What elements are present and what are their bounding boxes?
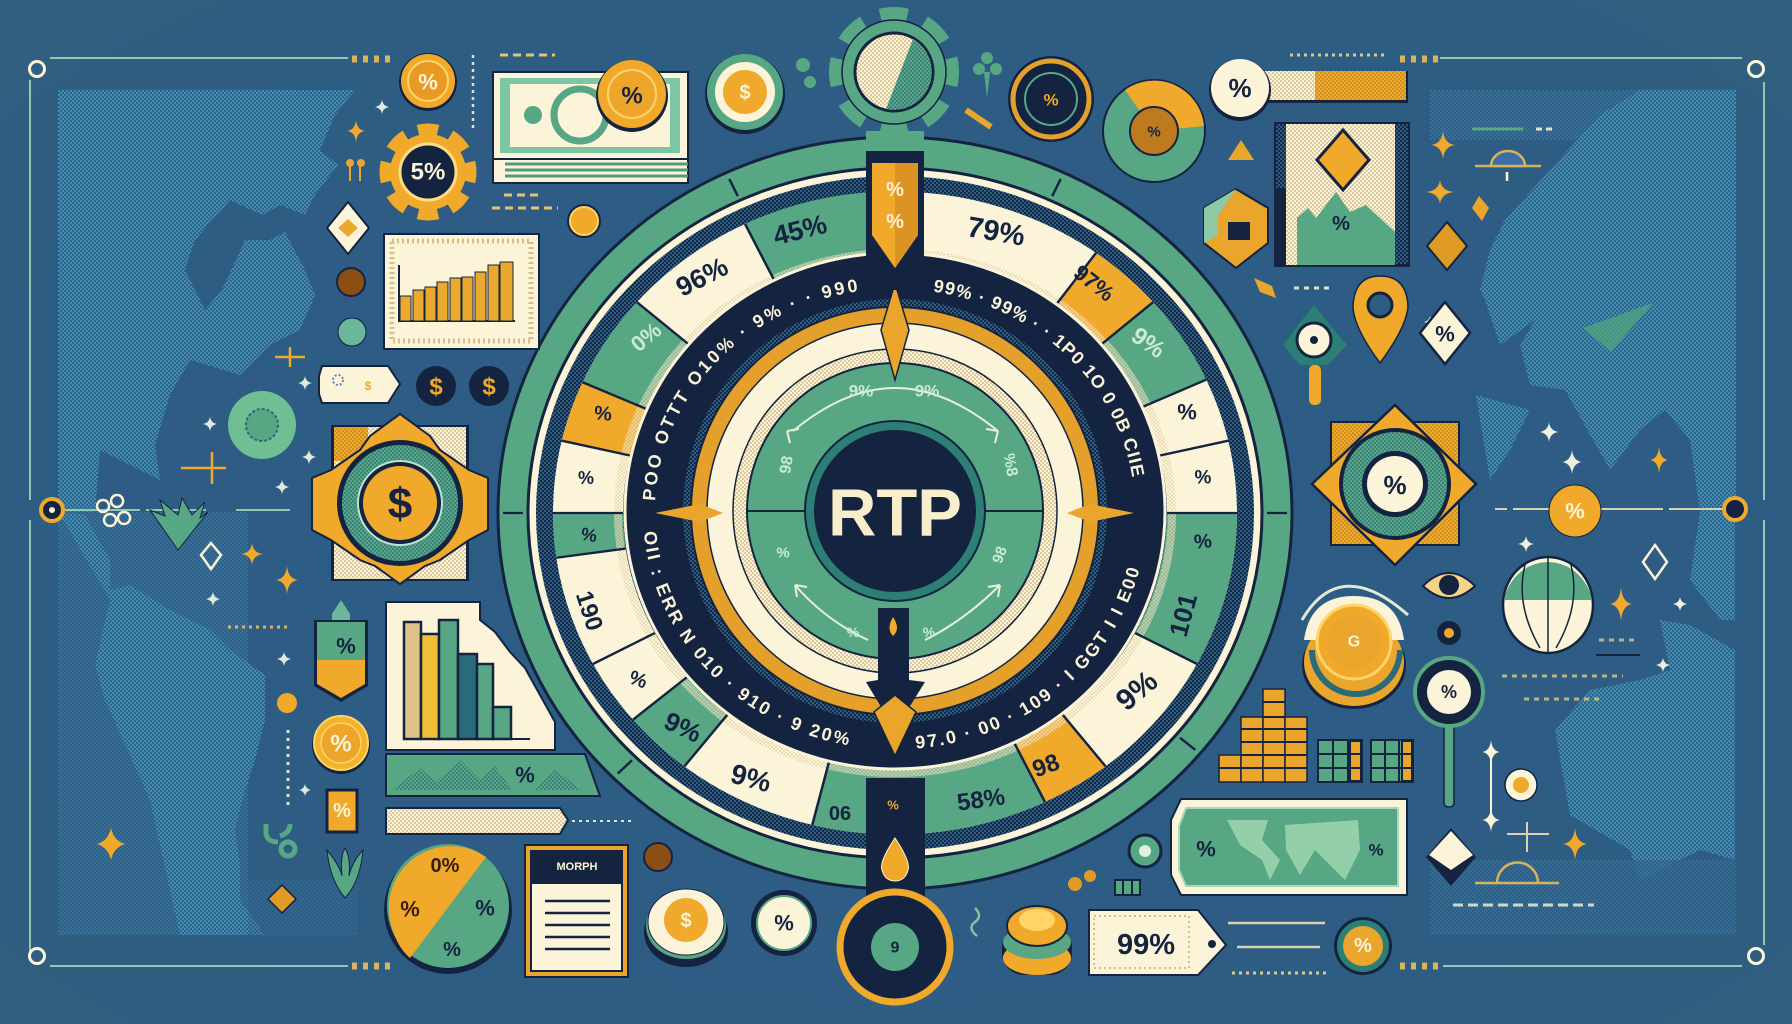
inner green dial: % (923, 624, 936, 640)
segment labels: % (593, 402, 613, 426)
segment labels: 97% (1069, 260, 1119, 306)
lines: beside tag (1228, 923, 1325, 947)
inner cream ring (707, 323, 1083, 699)
coin: cream percent (751, 890, 817, 956)
chart: donut (1103, 80, 1205, 182)
segment labels: 0% (626, 317, 666, 357)
segment labels: 190 (570, 588, 608, 634)
segment labels: 101 (1163, 590, 1203, 640)
segment labels: % (578, 468, 594, 488)
sparkles: right (1424, 131, 1687, 860)
dotted lead: top right (1290, 54, 1385, 56)
chart: pie: % (400, 896, 420, 922)
icon: fan plant (150, 498, 208, 550)
chart: pie: % (475, 896, 495, 920)
ring numbers: OII : ERR N 010 · 910 · 9 20% (644, 532, 849, 745)
gold ring (691, 307, 1099, 715)
top navy band with gold pennant: % (886, 179, 904, 201)
bottom navy band with drop: % (887, 798, 899, 812)
small grid: bottom (1115, 880, 1140, 895)
segment labels: % (626, 667, 650, 693)
icon: magnifier eye (1283, 305, 1347, 405)
gear: gold 5%: 5% (411, 158, 445, 186)
coin: cream percent: % (774, 910, 794, 936)
chart: stepped bars panel (386, 602, 555, 750)
icon: small diamond (327, 202, 369, 254)
teal grids (1318, 740, 1413, 782)
dashed lines: top left (492, 55, 558, 208)
coin: top left percent: % (418, 70, 438, 94)
connector: left (41, 495, 290, 526)
card: small gold (327, 790, 357, 832)
compass points (655, 283, 1134, 756)
ring numbers: POO OTTT O10% · 9% · · 990 (642, 280, 857, 500)
banner: green mountains: % (515, 762, 535, 788)
segment labels: % (1195, 468, 1212, 488)
center hub: RTP (828, 476, 962, 550)
magnifier: percent (1415, 658, 1483, 807)
segment labels: 98 (1029, 749, 1063, 783)
wheel: RTP dial (496, 136, 1294, 890)
ornament: stem with stars (1482, 740, 1500, 832)
segment labels: 58% (955, 783, 1007, 817)
segment labels: 9% (1110, 664, 1164, 718)
segment labels: 96% (671, 251, 733, 303)
coin: top left percent (399, 53, 457, 111)
token: small amber (1437, 621, 1461, 645)
coin: teal percent (1334, 917, 1392, 975)
coin: on cash: % (621, 82, 643, 110)
document: MORPH (557, 861, 598, 873)
coin: left percent: % (330, 730, 352, 758)
coin: large spinning (1302, 586, 1408, 709)
tokens: brown and green (337, 268, 366, 346)
coins: dollars (416, 366, 509, 406)
icon: small pyramid (1228, 140, 1254, 160)
icon: clover left (796, 58, 816, 88)
icon: hex block (1204, 189, 1268, 268)
segment labels: 79% (965, 211, 1028, 253)
icon: gold sprout (1254, 278, 1276, 298)
top navy band with gold pennant: % (886, 211, 904, 233)
bar: cream strip (386, 808, 632, 834)
ring numbers: 99% · 99% · · 1P0 1O 0 0B CIIE (934, 280, 1144, 477)
icon: plant (327, 848, 363, 898)
dotted line: beside tag (1232, 972, 1330, 974)
banner: green world map: % (1368, 840, 1384, 860)
chip: bottom dollar (644, 889, 728, 967)
bottom navy band with drop (866, 778, 925, 908)
token: bronze (644, 843, 672, 871)
card: small gold: % (333, 800, 351, 822)
inner green dial: 98 (989, 544, 1011, 566)
banner: green mountains (386, 754, 600, 796)
icon: eye (1423, 573, 1475, 598)
chip: top dollar (705, 54, 785, 134)
tag: green and gold shield (314, 600, 368, 702)
icon: percent diamond: % (1435, 322, 1455, 346)
inner green dial: % (847, 624, 860, 640)
connector: right (1495, 485, 1746, 537)
coin: small cream (1505, 769, 1537, 801)
inner green dial: 98 (777, 455, 797, 475)
badge: percent star: % (1383, 470, 1407, 500)
tag: green and gold shield: % (336, 634, 356, 658)
coins: dollars: $ (429, 374, 443, 400)
tag: 99% (1089, 910, 1226, 975)
lines and arc: top right (1294, 129, 1553, 288)
chip: bottom dollar: $ (680, 910, 692, 932)
connector: right: % (1565, 498, 1585, 524)
icon: cash stack (493, 72, 688, 183)
coin: teal percent: % (1354, 935, 1372, 957)
globe balloon (1503, 557, 1593, 653)
ring numbers: 97.0 · 00 · 109 · I GGT I I E00 (916, 568, 1139, 748)
inner green dial: 9% (915, 382, 939, 400)
icon: navy percent coin (1008, 56, 1094, 142)
chart: pie (384, 844, 512, 974)
inner green dial: %8 (1000, 452, 1020, 478)
coin: on cash (596, 60, 668, 132)
segment ring (462, 106, 1328, 920)
banner: green world map: % (1196, 836, 1216, 862)
chart: gold bars panel (384, 234, 539, 349)
icon: navy percent coin: % (1043, 90, 1059, 110)
icon: gradient diamond (1426, 828, 1476, 886)
ticket (319, 366, 400, 403)
badge: dollar: $ (388, 480, 412, 528)
segment labels: % (1193, 530, 1213, 554)
icon: gold diamond card (1427, 222, 1467, 270)
icon: bottom gold ring (840, 892, 950, 1002)
icon: pins gold (346, 159, 365, 181)
icon: horizon arc (1475, 862, 1559, 883)
icon: gold stick (966, 110, 991, 127)
inner green dial: % (776, 544, 790, 562)
chart: pie: 0% (431, 855, 460, 877)
segment labels: 9% (727, 758, 775, 798)
icon: pin (1353, 276, 1408, 363)
coin: large spinning: G (1348, 634, 1360, 650)
coins: dollars: $ (482, 374, 496, 400)
banner: green world map (1171, 799, 1407, 895)
dashed line: lower right (1453, 904, 1594, 906)
tag: 99%: 99% (1117, 929, 1175, 961)
magnifier: percent: % (1441, 682, 1457, 702)
segment labels: 9% (660, 705, 706, 749)
cream trim ring (528, 168, 1262, 858)
segment labels: 9% (1126, 322, 1170, 364)
card: framed diamond: % (1332, 213, 1350, 235)
map: left dotted world map (58, 90, 358, 935)
segment labels: % (1177, 400, 1197, 424)
icon: gold diamond (268, 885, 296, 913)
top green gear (838, 16, 950, 128)
segment labels: 45% (770, 209, 830, 251)
coin stack: bottom (1002, 906, 1072, 975)
icon: bottom gold ring: 9 (891, 940, 900, 956)
dotted vertical (472, 55, 474, 130)
top navy band with gold pennant (866, 131, 924, 290)
chart: pie: % (443, 939, 461, 961)
navy text ring (625, 253, 1165, 769)
sparkles: left (97, 100, 389, 860)
center hub (805, 421, 985, 601)
outer green ring (498, 137, 1292, 889)
ticket: $ (365, 379, 372, 393)
gold block stacks (1219, 689, 1307, 782)
segment labels: % (579, 524, 599, 546)
gear: gold 5% (387, 131, 469, 213)
segment labels: 06 (829, 803, 851, 825)
small icons: bottom (971, 835, 1161, 936)
inner green dial (747, 363, 1043, 659)
icon: percent key bar (1209, 59, 1408, 121)
dotted blue ring (536, 176, 1254, 850)
dotted grey ring (733, 349, 1057, 673)
inner green dial: 9% (849, 382, 873, 400)
chip: green disk (228, 391, 296, 459)
chart: donut: % (1147, 124, 1161, 140)
bottom navy arrow (866, 608, 925, 730)
icon: green hook (266, 824, 295, 856)
badge: dollar (312, 414, 488, 584)
coin: small amber top (567, 204, 601, 238)
ring numbers (642, 280, 1144, 748)
inner dotted blue ring (683, 299, 1107, 723)
document (525, 845, 628, 977)
coin: left percent (312, 716, 370, 774)
icon: percent key bar: % (1228, 73, 1252, 103)
icon: clover right (973, 52, 1002, 98)
chip: top dollar: $ (739, 82, 751, 104)
card: framed diamond (1274, 122, 1410, 267)
icon: gold leaf (1472, 196, 1489, 221)
badge: percent star (1312, 405, 1476, 565)
segment labels (570, 209, 1213, 825)
map: right dotted world map (1430, 90, 1736, 935)
icon: percent diamond (1420, 302, 1470, 364)
icon: gold drop (277, 693, 297, 713)
